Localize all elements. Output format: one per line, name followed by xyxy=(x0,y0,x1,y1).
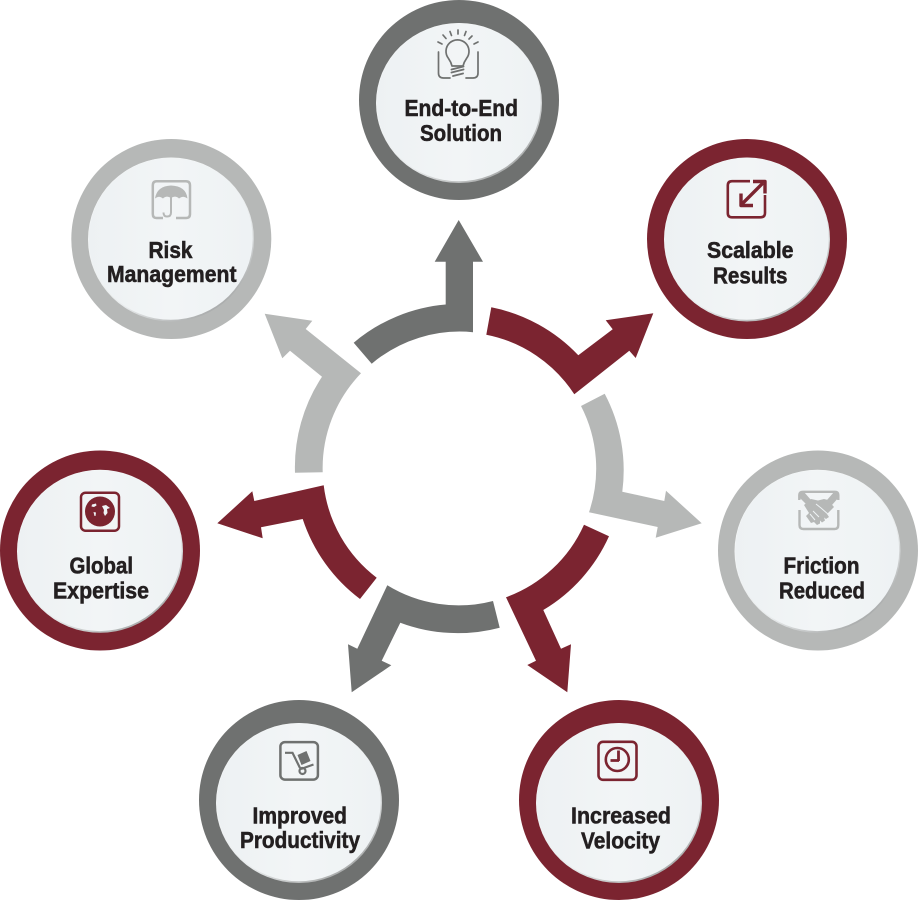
label: Results xyxy=(713,262,788,288)
panel: Global Expertise xyxy=(0,450,200,650)
arrow: to Global Expertise xyxy=(217,485,377,599)
icon: globe xyxy=(81,493,119,531)
label xyxy=(404,95,518,146)
icon: expand arrows xyxy=(728,181,765,217)
panel: End-to-End Solution xyxy=(359,0,559,200)
arrow: to End-to-End Solution xyxy=(354,220,483,364)
icon: light bulb xyxy=(438,30,478,78)
arrow: to Risk Management xyxy=(265,314,361,473)
panel: Scalable Results xyxy=(647,139,847,339)
arrow: to Friction Reduced xyxy=(581,394,702,538)
panel: Increased Velocity xyxy=(519,700,719,900)
label xyxy=(571,802,671,854)
arrow: to Improved Productivity xyxy=(348,585,500,692)
label: Friction xyxy=(784,552,860,578)
label xyxy=(707,237,794,288)
label xyxy=(53,552,149,604)
label: Solution xyxy=(420,120,502,146)
panel: Risk Management xyxy=(71,139,271,339)
label: Scalable xyxy=(707,237,794,263)
label: Velocity xyxy=(581,828,660,854)
arrow: to Scalable Results xyxy=(486,307,653,394)
label: Increased xyxy=(571,802,671,828)
icon: umbrella xyxy=(153,181,190,218)
label: Expertise xyxy=(53,578,149,604)
icon: hand truck xyxy=(280,742,318,780)
panel: Friction Reduced xyxy=(718,450,918,650)
label: Improved xyxy=(252,802,347,828)
icon: clock xyxy=(598,742,636,780)
label: Management xyxy=(107,261,237,287)
panel: Improved Productivity xyxy=(199,700,399,900)
arrow: to Increased Velocity xyxy=(506,525,609,692)
label: Reduced xyxy=(779,578,865,604)
label xyxy=(107,237,237,287)
label xyxy=(240,802,360,853)
label: Risk xyxy=(148,237,193,263)
icon: handshake xyxy=(799,492,839,529)
label xyxy=(779,552,865,604)
label: Global xyxy=(70,552,133,578)
label: Productivity xyxy=(240,827,360,853)
label: End-to-End xyxy=(404,95,518,121)
